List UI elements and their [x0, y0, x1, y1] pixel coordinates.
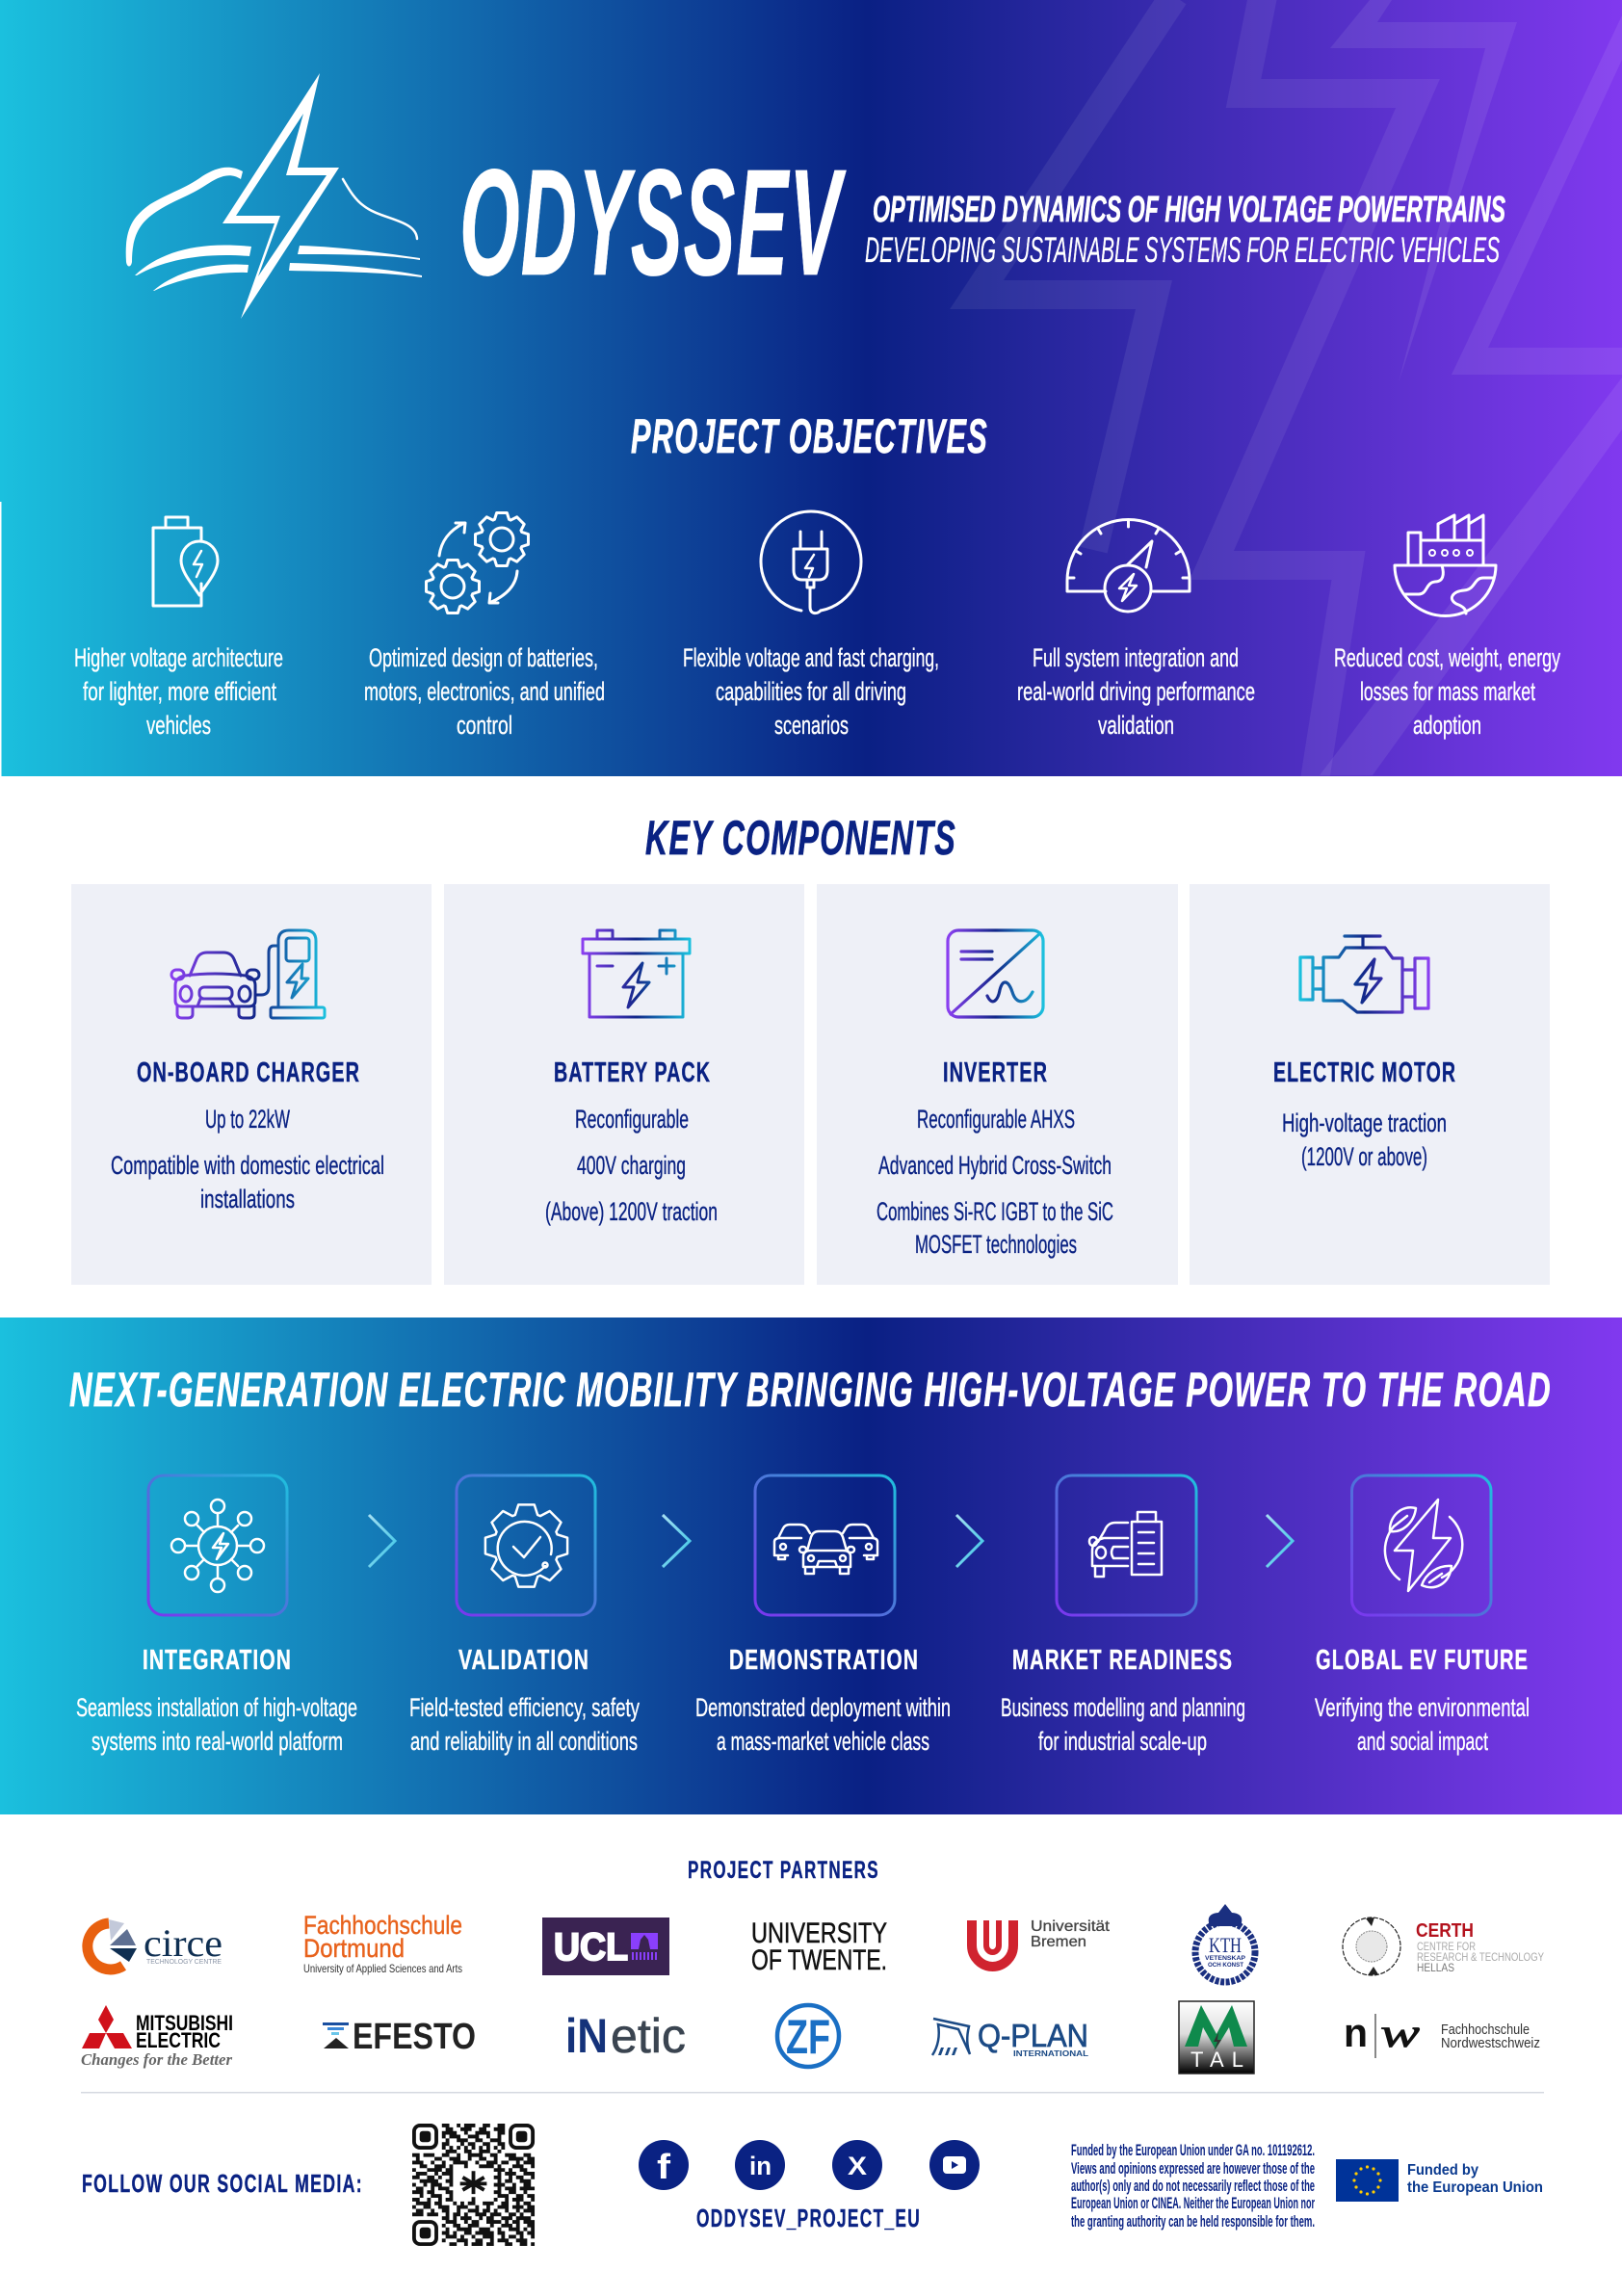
logo: funded by the European Union: Funded by	[1407, 2162, 1478, 2179]
step: demonstration	[695, 1475, 951, 1756]
text block: funding disclaimer: European Union or CINEA. Neither the European Union nor	[1071, 2194, 1315, 2212]
step: global EV future	[1315, 1475, 1530, 1756]
logo: Fachhochschule Dortmund: Dortmund	[303, 1934, 405, 1963]
text: objective 5	[1334, 643, 1560, 740]
logo: funded by the European Union	[1336, 2159, 1543, 2202]
text: objective 4: Full system integration and	[1033, 643, 1239, 672]
logo: FHNW: n	[1344, 2010, 1368, 2055]
text: objective 1: Higher voltage architecture	[74, 643, 283, 672]
logo: Mitsubishi Electric	[81, 2005, 233, 2069]
text: market readiness description: for industrial scale-up	[1038, 1727, 1207, 1756]
logo: KTH: VETENSKAP	[1205, 1956, 1245, 1962]
icon: network hub	[148, 1475, 287, 1615]
text: objective 3: capabilities for all driving	[716, 677, 906, 706]
logo: iNetic	[565, 2009, 686, 2063]
logo: Q-PLAN: Q-PLAN	[978, 2018, 1088, 2053]
icon: car and charging station	[171, 930, 325, 1018]
icon: linkedin: in	[749, 2152, 772, 2180]
text: integration description: Seamless installation of high-voltage	[76, 1693, 357, 1722]
objective: higher voltage architecture	[74, 517, 283, 740]
text: battery pack title: BATTERY PACK	[554, 1057, 711, 1088]
icon: QR code	[412, 2126, 535, 2244]
panel: battery pack card	[444, 884, 804, 1285]
panel: electric motor card	[1190, 884, 1550, 1285]
logo: Mitsubishi Electric: Changes for the Better	[81, 2050, 232, 2069]
text: battery pack details: (Above) 1200V traction	[545, 1197, 718, 1226]
logo: TAL: TAL	[1190, 2048, 1243, 2072]
step: validation	[409, 1475, 640, 1756]
text: inverter details: MOSFET technologies	[915, 1230, 1077, 1259]
text: objective 5: adoption	[1413, 711, 1481, 740]
panel: inverter card	[817, 884, 1178, 1285]
text: objective 4	[1017, 643, 1255, 740]
icon: car and battery	[1057, 1475, 1196, 1615]
text: objective 2: control	[457, 711, 512, 740]
icon: facebook	[639, 2140, 689, 2190]
text block: funding disclaimer	[1071, 2141, 1315, 2231]
arrow: validation to demonstration	[663, 1515, 690, 1567]
text: market readiness description	[1001, 1693, 1245, 1756]
icon: X	[832, 2140, 882, 2190]
icon: linkedin	[735, 2140, 785, 2190]
text: inverter details: Advanced Hybrid Cross-Switch	[878, 1151, 1112, 1180]
logo: CERTH	[1343, 1918, 1544, 1975]
logo: KTH: KTH	[1209, 1933, 1242, 1957]
text: follow our social media: FOLLOW OUR SOCIAL MEDIA:	[82, 2169, 363, 2198]
text: objective 4: validation	[1098, 711, 1174, 740]
icon: three cars	[755, 1475, 895, 1615]
text block: funding disclaimer: Funded by the European Union under GA no. 101192612.	[1071, 2141, 1315, 2159]
text: demonstration title: DEMONSTRATION	[729, 1645, 919, 1676]
logo: Fachhochschule Dortmund: University of Applied Sciences and Arts	[303, 1962, 462, 1975]
logo: University of Twente	[751, 1918, 887, 1976]
text: demonstration description	[695, 1693, 951, 1756]
icon: electric motor	[1300, 936, 1428, 1012]
text: social handle: ODDYSEV_PROJECT_EU	[696, 2204, 921, 2232]
text: inverter details: Reconfigurable AHXS	[917, 1105, 1075, 1134]
text: battery pack details: Reconfigurable	[575, 1105, 689, 1134]
logo: UCL	[542, 1918, 669, 1975]
logo: Q-PLAN	[932, 2018, 1088, 2058]
icon: Odyssev logo mark	[126, 73, 422, 319]
logo: CERTH: RESEARCH & TECHNOLOGY	[1417, 1950, 1544, 1964]
logo: FHNW: Fachhochschule	[1441, 2022, 1530, 2038]
text: global EV future description	[1315, 1693, 1530, 1756]
text: objective 1: for lighter, more efficient	[83, 677, 276, 706]
icon: plug in circle	[761, 511, 861, 613]
panel: header gradient section	[0, 0, 1622, 780]
logo: Q-PLAN: INTERNATIONAL	[1013, 2049, 1088, 2058]
text: objective 2	[364, 643, 605, 740]
step: integration	[76, 1475, 357, 1756]
heading: project partners: PROJECT PARTNERS	[688, 1857, 879, 1884]
logo: Mitsubishi Electric: MITSUBISHI	[136, 2011, 233, 2035]
logo: Fachhochschule Dortmund: Fachhochschule	[303, 1911, 462, 1940]
logo: UCL: UCL	[554, 1926, 628, 1969]
logo: iNetic: etic	[611, 2009, 686, 2063]
logo: iNetic: iN	[565, 2009, 608, 2063]
text: inverter details: Combines Si-RC IGBT to the SiC	[876, 1197, 1113, 1226]
text: objective 1: vehicles	[146, 711, 211, 740]
icon: car battery	[583, 930, 690, 1017]
text: electric motor title: ELECTRIC MOTOR	[1273, 1057, 1456, 1088]
text: objective 3: scenarios	[774, 711, 849, 740]
logo: funded by the European Union: the European Union	[1407, 2179, 1543, 2196]
logo: KTH	[1195, 1904, 1255, 1982]
text: objective 2: motors, electronics, and unified	[364, 677, 605, 706]
objective: flexible charging	[683, 511, 939, 740]
text: objective 1	[74, 643, 283, 740]
logo: FHNW: Nordwestschweiz	[1441, 2035, 1540, 2051]
icon: YouTube	[929, 2140, 980, 2190]
logo: University of Twente: UNIVERSITY	[751, 1918, 887, 1949]
logo: KTH: OCH KONST	[1208, 1963, 1243, 1969]
logo: circe: TECHNOLOGY CENTRE	[146, 1959, 222, 1966]
panel: partner logos	[81, 1904, 1544, 2074]
title: ODYSSEV wordmark: ODYSSEV	[459, 139, 847, 307]
objective: optimized design	[364, 513, 605, 740]
text: integration description: systems into real-world platform	[92, 1727, 343, 1756]
logo: TAL	[1179, 2001, 1254, 2074]
text: objective 5: losses for mass market	[1360, 677, 1535, 706]
panel: next-generation mobility section	[0, 1318, 1622, 1814]
logo: CERTH: CENTRE FOR	[1417, 1940, 1476, 1953]
text: validation description: and reliability in all conditions	[410, 1727, 638, 1756]
text: objective 3	[683, 643, 939, 740]
logo: circe: circe	[144, 1921, 222, 1965]
text block: tagline	[865, 190, 1505, 270]
logo: ZF	[777, 2005, 839, 2067]
logo: CERTH: CERTH	[1416, 1920, 1474, 1942]
text: electric motor details: (1200V or above)	[1301, 1142, 1427, 1171]
text: on-board charger title: ON-BOARD CHARGER	[137, 1057, 360, 1088]
text: validation description	[409, 1693, 640, 1756]
logo: Universität Bremen: Universität	[1031, 1918, 1111, 1935]
text: global EV future description: Verifying the environmental	[1315, 1693, 1530, 1722]
objective: reduced cost	[1334, 515, 1560, 740]
text: electric motor details	[1282, 1109, 1447, 1171]
text: battery pack details	[545, 1105, 718, 1226]
text: demonstration description: Demonstrated deployment within	[695, 1693, 951, 1722]
arrow: integration to validation	[369, 1515, 395, 1567]
logo: Mitsubishi Electric: ELECTRIC	[136, 2028, 221, 2052]
logo: ZF: ZF	[786, 2010, 830, 2064]
text block: funding disclaimer: author(s) only and do not necessarily reflect those of the	[1071, 2177, 1315, 2195]
icon: X: X	[848, 2152, 867, 2180]
text: objective 4: real-world driving performance	[1017, 677, 1255, 706]
logo: circe	[88, 1919, 222, 1970]
text: objective 3: Flexible voltage and fast charging,	[683, 643, 939, 672]
icon: gear with check	[457, 1475, 595, 1615]
logo: University of Twente: OF TWENTE.	[751, 1944, 887, 1976]
logo: Universität Bremen	[972, 1918, 1111, 1967]
logo: FHNW: w	[1380, 2012, 1420, 2056]
arrow: market readiness to global EV future	[1267, 1515, 1293, 1567]
text: market readiness description: Business modelling and planning	[1001, 1693, 1245, 1722]
panel: on-board charger card	[71, 884, 432, 1285]
icon: gears with arrows	[427, 513, 528, 613]
heading: key components: KEY COMPONENTS	[645, 811, 956, 865]
text: on-board charger details: Compatible with domestic electrical	[111, 1151, 384, 1180]
text: validation description: Field-tested efficiency, safety	[409, 1693, 640, 1722]
text: validation title: VALIDATION	[458, 1645, 589, 1676]
text: on-board charger details	[111, 1105, 384, 1213]
step: market readiness	[1001, 1475, 1245, 1756]
text: objective 2: Optimized design of batteries,	[369, 643, 598, 672]
heading: project objectives: PROJECT OBJECTIVES	[631, 409, 988, 463]
text: electric motor details: High-voltage traction	[1282, 1109, 1447, 1137]
text: demonstration description: a mass-market vehicle class	[717, 1727, 929, 1756]
text: global EV future title: GLOBAL EV FUTURE	[1316, 1645, 1529, 1676]
text: on-board charger details: Up to 22kW	[205, 1105, 290, 1134]
icon: facebook: f	[657, 2147, 671, 2186]
icon: inverter	[948, 930, 1043, 1017]
icon: bolt with leaves	[1352, 1475, 1491, 1615]
logo: FHNW	[1344, 2010, 1540, 2058]
text: global EV future description: and social impact	[1357, 1727, 1488, 1756]
text: inverter details	[876, 1105, 1113, 1259]
logo: Universität Bremen: Bremen	[1031, 1934, 1086, 1950]
logo: Fachhochschule Dortmund	[303, 1911, 462, 1975]
text: market readiness title: MARKET READINESS	[1012, 1645, 1233, 1676]
text: inverter title: INVERTER	[943, 1057, 1048, 1088]
text block: funding disclaimer: Views and opinions expressed are however those of the	[1071, 2159, 1315, 2178]
logo: CERTH: HELLAS	[1417, 1961, 1454, 1974]
text: on-board charger details: installations	[200, 1185, 295, 1213]
logo: EFESTO: EFESTO	[353, 2017, 476, 2057]
icon: speedometer	[1067, 520, 1190, 612]
objective: system integration	[1017, 520, 1255, 740]
text: integration title: INTEGRATION	[143, 1645, 292, 1676]
arrow: demonstration to market readiness	[956, 1515, 982, 1567]
panel: social media icons	[639, 2140, 980, 2232]
icon: battery with pin	[153, 517, 218, 606]
text: battery pack details: 400V charging	[577, 1151, 686, 1180]
text block: funding disclaimer: the granting authority can be held responsible for them.	[1071, 2212, 1315, 2231]
text: integration description	[76, 1693, 357, 1756]
icon: factory ship on globe	[1395, 515, 1496, 616]
